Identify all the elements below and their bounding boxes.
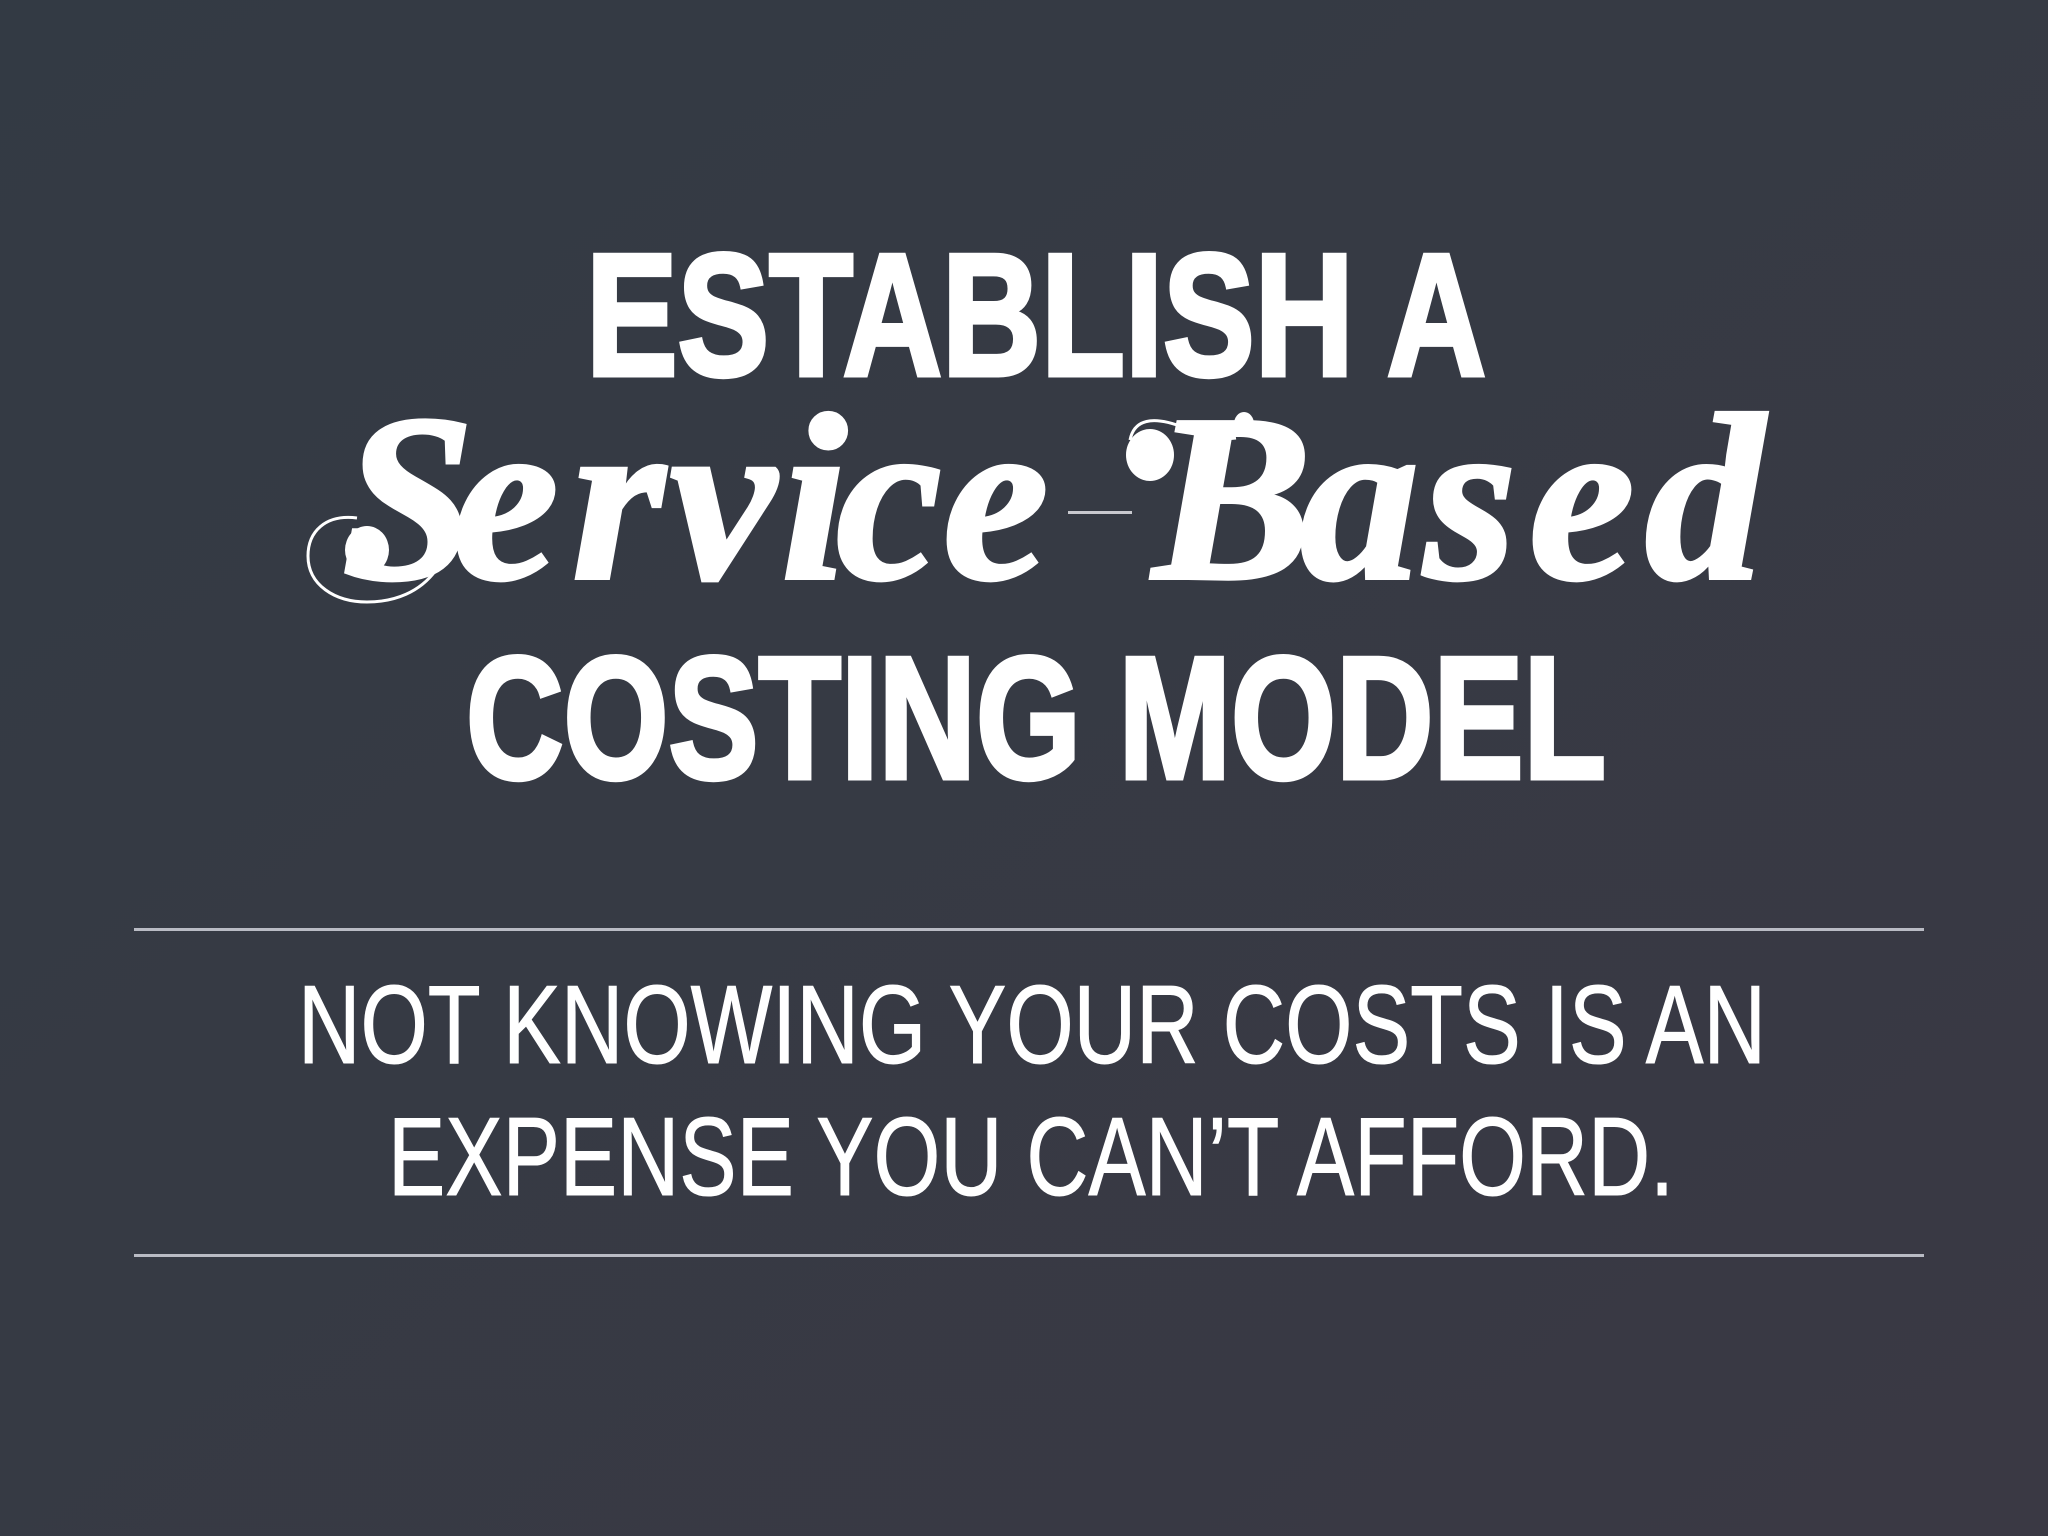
title <box>308 217 1767 815</box>
title line: costing model: COSTING MODEL <box>466 620 1606 815</box>
bottom divider <box>134 1254 1924 1257</box>
script hyphen <box>1068 511 1132 514</box>
subtitle text <box>298 963 1766 1219</box>
script word: service: Service <box>342 367 1049 630</box>
script word: based: Based <box>1150 367 1767 630</box>
top divider <box>134 928 1924 931</box>
subtitle line 2: EXPENSE YOU CAN’T AFFORD. <box>388 1095 1674 1219</box>
title line: establish a: ESTABLISH A <box>586 217 1486 412</box>
swash on S <box>308 517 436 602</box>
title line: service-based script <box>308 367 1767 630</box>
swash on B <box>1126 412 1254 481</box>
